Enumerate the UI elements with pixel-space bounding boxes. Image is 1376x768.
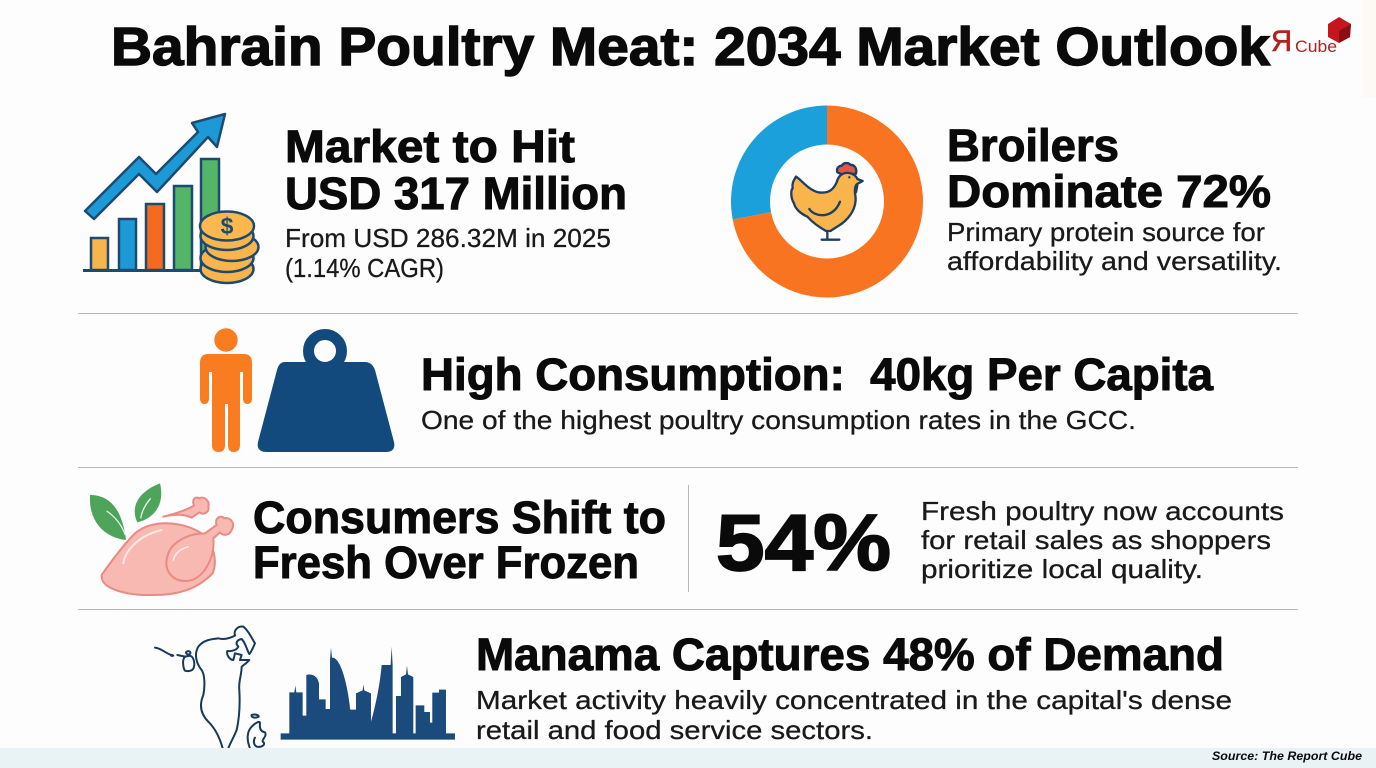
icon: raw chicken with leaves <box>90 483 233 595</box>
text: fresh poultry detail <box>921 496 1284 584</box>
panel: manama demand <box>155 627 1232 748</box>
footer bar <box>0 748 1376 768</box>
text: broilers detail <box>947 217 1282 276</box>
heading: market size: USD 317 Million <box>285 168 627 219</box>
heading: broilers <box>947 120 1271 217</box>
heading: market size: Market to Hit <box>285 121 575 172</box>
text: fresh poultry detail: Fresh poultry now accounts <box>921 496 1284 526</box>
text: fresh poultry detail: prioritize local quality. <box>921 554 1203 584</box>
heading: manama: Manama Captures 48% of Demand <box>476 629 1224 680</box>
panel: broilers <box>731 106 1282 298</box>
icon: person <box>200 328 252 452</box>
icon: growth chart with coins <box>83 114 258 283</box>
text: manama detail: Market activity heavily concentrated in the capital's dense <box>476 685 1232 715</box>
text: broilers detail: affordability and versatility. <box>947 246 1282 276</box>
heading: broilers: Dominate 72% <box>947 166 1271 217</box>
icon: hen <box>791 163 863 240</box>
text: manama detail <box>476 685 1232 745</box>
stat: 54%: 54% <box>716 498 891 587</box>
icon: weight <box>258 334 394 452</box>
text: consumption detail: One of the highest poultry consumption rates in the GCC. <box>421 405 1136 435</box>
logo: RCube: Я <box>1271 25 1292 58</box>
logo: RCube <box>1271 17 1351 58</box>
title: Bahrain Poultry Meat: 2034 Market Outlook <box>111 17 1271 77</box>
heading: market size <box>285 121 627 219</box>
icon: Bahrain map outline <box>155 627 266 748</box>
text: manama detail: retail and food service sectors. <box>476 715 873 745</box>
heading: consumption: High Consumption: 40kg Per Capita <box>421 349 1214 400</box>
chart: broiler share donut <box>731 106 923 298</box>
text: fresh poultry detail: for retail sales as shoppers <box>921 525 1271 555</box>
icon: Manama skyline <box>281 647 455 740</box>
heading: fresh over frozen: Fresh Over Frozen <box>253 537 639 588</box>
panel: consumption <box>200 328 1214 452</box>
heading: fresh over frozen <box>253 492 666 588</box>
text: market size detail: (1.14% CAGR) <box>285 253 444 283</box>
logo: RCube: Cube <box>1295 37 1337 56</box>
heading: fresh over frozen: Consumers Shift to <box>253 492 666 543</box>
panel: fresh over frozen <box>90 483 1284 595</box>
text: market size detail <box>285 223 611 283</box>
text: broilers detail: Primary protein source for <box>947 217 1265 247</box>
panel: market size <box>83 114 627 283</box>
text: market size detail: From USD 286.32M in 2025 <box>285 223 611 253</box>
source note: Source: The Report Cube <box>1212 749 1362 763</box>
icon: growth chart with coins: $ <box>221 213 234 239</box>
heading: broilers: Broilers <box>947 120 1119 171</box>
